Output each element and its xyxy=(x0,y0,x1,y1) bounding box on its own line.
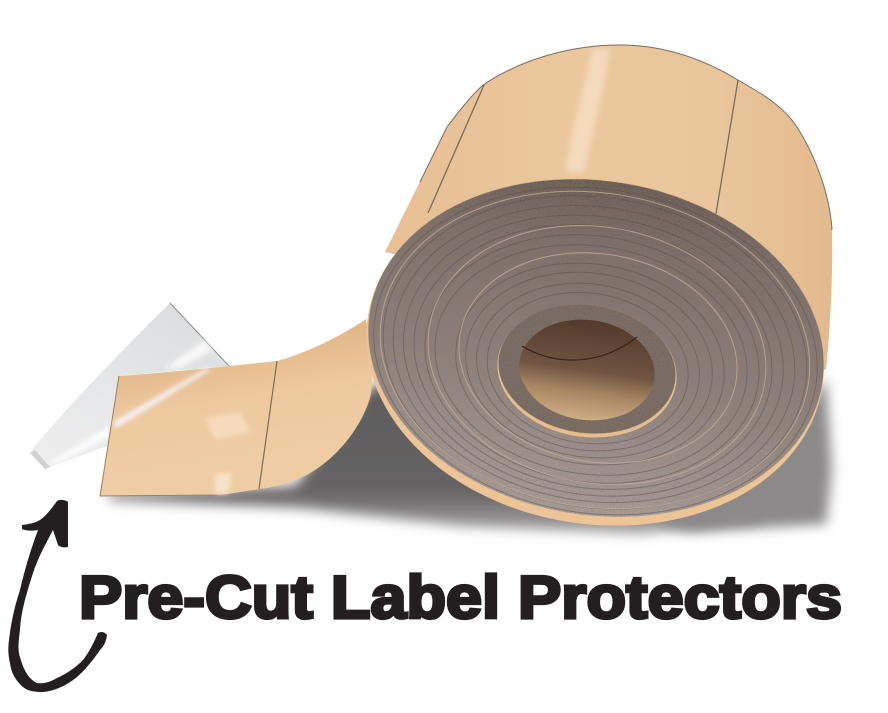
clear protector film xyxy=(30,303,229,469)
shadow under the roll xyxy=(108,378,832,534)
winding rings xyxy=(350,156,841,546)
roll outer body xyxy=(385,45,832,370)
roll end face xyxy=(341,146,849,558)
caption: Pre-Cut Label Protectors xyxy=(79,564,842,631)
roll core xyxy=(489,293,685,449)
unrolled label strip xyxy=(100,319,372,496)
curved arrow xyxy=(8,500,107,692)
